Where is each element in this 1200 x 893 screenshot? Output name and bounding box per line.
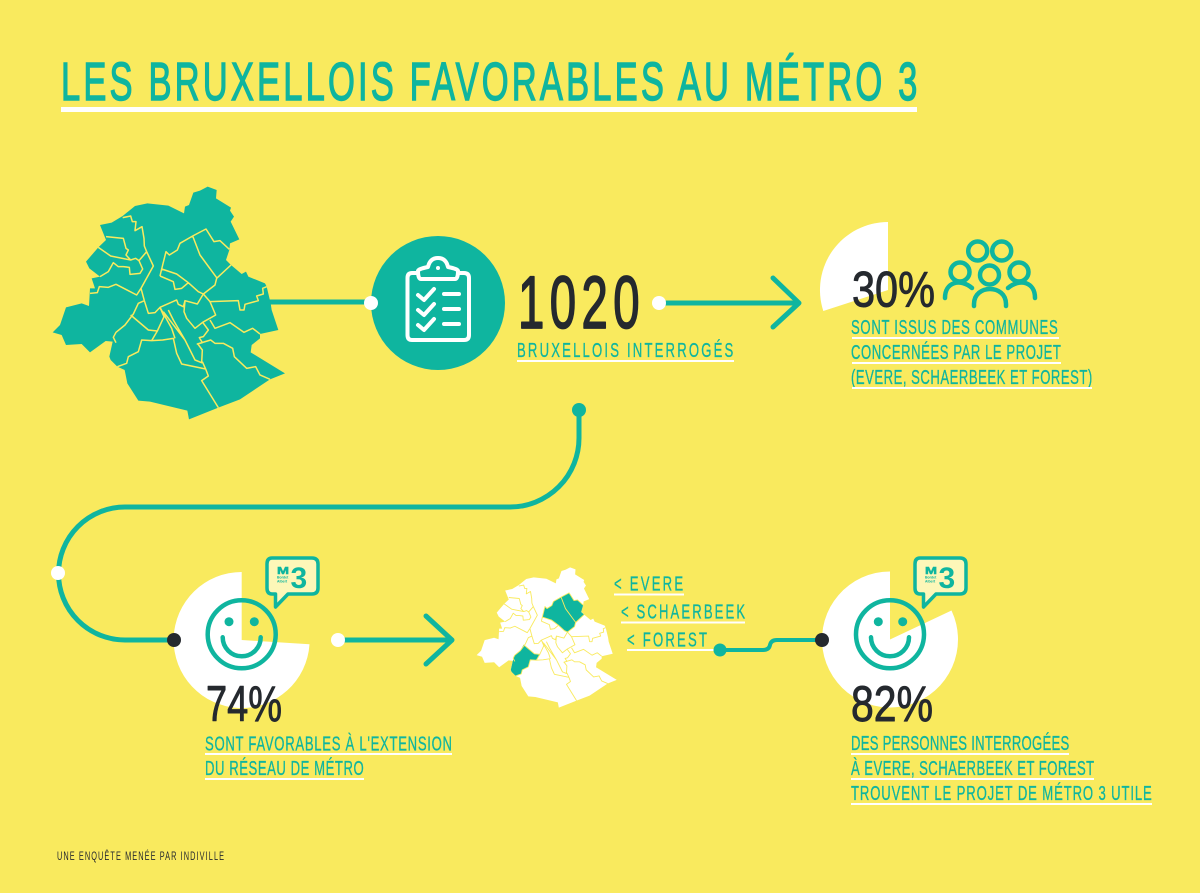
stat: 1020: 1020 <box>518 262 640 345</box>
text: 82 percent description: DES PERSONNES INTERROGÉES <box>851 731 1069 755</box>
pie: 82 percent <box>822 572 958 708</box>
icon: clipboard <box>408 258 469 340</box>
icon: M3 speech bubble: 3 <box>290 562 307 595</box>
connector: map to survey circle <box>268 300 371 304</box>
text: 82 percent description <box>851 731 1152 805</box>
pie: 30 percent <box>820 222 888 311</box>
map: highlighted communes <box>477 567 617 708</box>
icon: M3 speech bubble: Bordet <box>277 576 289 580</box>
dark node <box>167 633 181 647</box>
icon: M3 speech bubble: M <box>925 565 937 577</box>
icon: M3 speech bubble <box>267 558 318 607</box>
icon: M3 speech bubble: Bordet <box>925 576 937 580</box>
stat: 74%: 74% <box>206 676 282 732</box>
text: 74 percent description: DU RÉSEAU DE MÉTRO <box>205 756 364 780</box>
white node on map connector <box>364 296 378 310</box>
icon: M3 speech bubble: Albert <box>925 580 936 584</box>
arrow: to communes map <box>331 616 452 664</box>
icon: M3 speech bubble: Albert <box>277 580 288 584</box>
stat: 30%: 30% <box>852 262 935 318</box>
pie: 74 percent <box>174 572 310 708</box>
footer credit: UNE ENQUÊTE MENÉE PAR INDIVILLE <box>57 850 224 864</box>
text: 30 percent description: CONCERNÉES PAR LE PROJET <box>851 340 1061 364</box>
icon: M3 speech bubble <box>915 558 966 607</box>
labels: commune names: < SCHAERBEEK <box>621 599 746 623</box>
icon: M3 speech bubble: 3 <box>938 562 955 595</box>
text: 82 percent description: À EVERE, SCHAERBEEK ET FOREST <box>851 756 1095 780</box>
icon: group of people <box>945 242 1035 306</box>
survey circle with clipboard icon <box>371 236 505 370</box>
labels: commune names: < EVERE <box>614 571 683 595</box>
map: Brussels communes <box>53 187 285 419</box>
text: 30 percent description: SONT ISSUS DES COMMUNES <box>851 315 1058 339</box>
text: 74 percent description: SONT FAVORABLES À L'EXTENSION <box>205 731 452 755</box>
text: 74 percent description <box>205 731 452 780</box>
labels: commune names: < FOREST <box>627 627 707 651</box>
dark node <box>815 633 829 647</box>
labels: commune names <box>614 571 746 651</box>
icon: smiley 82 <box>856 600 924 668</box>
arrow: to 30 percent <box>652 278 799 327</box>
stat: 82%: 82% <box>851 676 933 732</box>
text: 82 percent description: TROUVENT LE PROJET DE MÉTRO 3 UTILE <box>851 781 1152 805</box>
text: 30 percent description <box>851 315 1092 389</box>
icon: M3 speech bubble: M <box>277 565 289 577</box>
title: LES BRUXELLOIS FAVORABLES AU MÉTRO 3 <box>61 51 917 112</box>
icon: smiley 74 <box>208 600 276 668</box>
connector: communes to 82 percent <box>714 640 822 656</box>
label: Bruxellois interrogés: BRUXELLOIS INTERROGÉS <box>517 338 733 362</box>
connector: curved line to second row <box>51 403 586 640</box>
text: 30 percent description: (EVERE, SCHAERBEEK ET FOREST) <box>851 365 1092 389</box>
